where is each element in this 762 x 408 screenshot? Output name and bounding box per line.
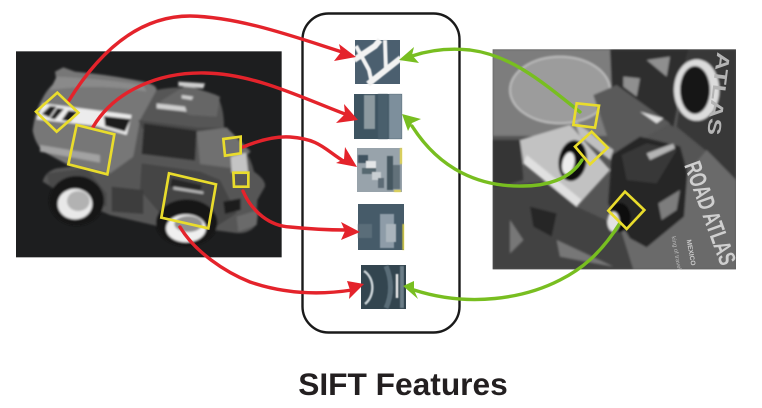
patch 3	[357, 148, 402, 192]
green arrows: right image to patches	[399, 47, 620, 299]
patch 1	[354, 40, 401, 84]
title: SIFT Features	[298, 366, 508, 402]
photo: cluttered scene with toy truck	[493, 49, 741, 270]
photo: toy truck on black background	[16, 51, 282, 257]
red arrow 2	[93, 73, 358, 127]
photo: cluttered scene with toy truck: king of travel	[670, 236, 681, 270]
panel: SIFT feature patches	[302, 14, 460, 332]
red arrow 3	[243, 137, 357, 167]
green arrow 2	[402, 114, 582, 186]
patch 4	[358, 204, 404, 250]
green arrow 1	[399, 47, 580, 112]
photo: cluttered scene with toy truck: ATLAS	[703, 51, 734, 136]
patch 5	[361, 265, 406, 309]
red arrows: left image to patches	[68, 16, 364, 299]
photo: cluttered scene with toy truck: MEXICO	[685, 239, 696, 266]
photo: cluttered scene with toy truck: ROAD ATLAS	[678, 158, 741, 269]
red arrow 4	[243, 191, 360, 240]
patch 2	[354, 94, 402, 139]
yellow keypoint boxes: left image	[36, 93, 248, 228]
green arrow 3	[403, 223, 620, 299]
red arrow 1	[68, 16, 356, 102]
red arrow 5	[180, 227, 364, 299]
yellow keypoint boxes: right image	[573, 103, 644, 229]
